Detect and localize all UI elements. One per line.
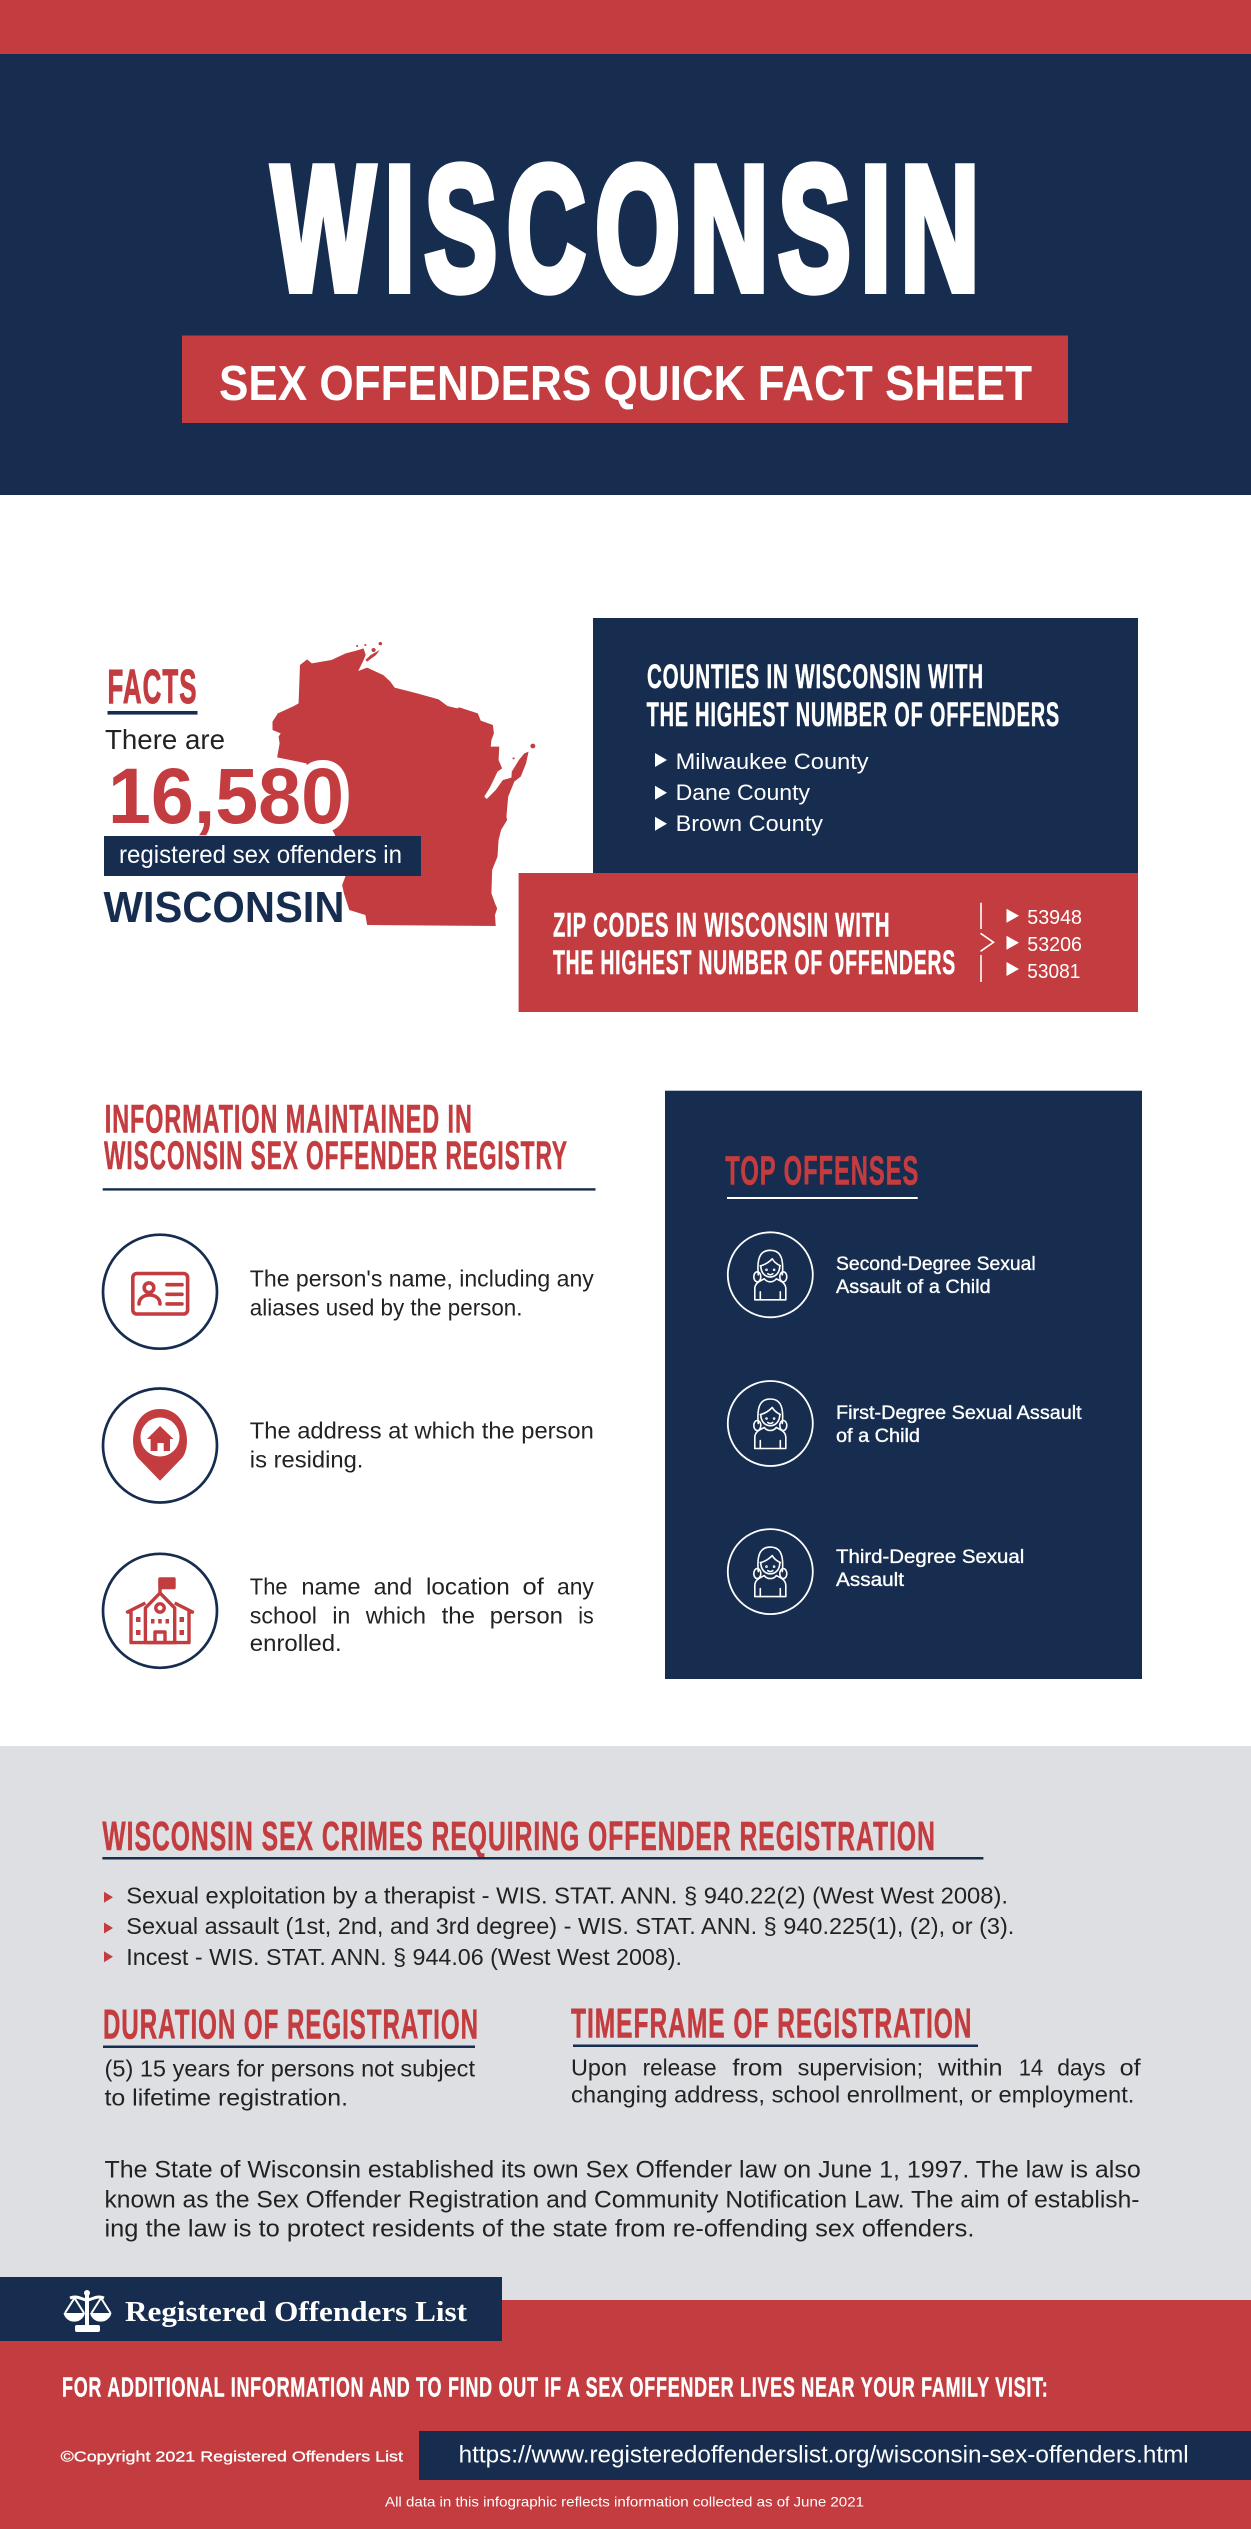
website link bar: [419, 2431, 1251, 2480]
text: school: location: [426, 1574, 510, 1600]
duration of registration: (5) 15 years for persons not subject: [104, 2056, 476, 2082]
law paragraph: ing the law is to protect residents of the state from re-offending sex offenders.: [104, 2216, 974, 2243]
text: third-degree: Third-Degree Sexual: [836, 1547, 1024, 1568]
text: school: the: [442, 1602, 475, 1628]
icon: id card: [103, 1235, 217, 1349]
text: second-degree: [836, 1254, 1036, 1298]
timeframe of registration: changing address, school enrollment, or employment.: [571, 2081, 1134, 2107]
text: school: in: [332, 1602, 350, 1628]
item: address: [103, 1388, 594, 1502]
facts heading: FACTS: [108, 661, 198, 714]
text: first-degree: of a Child: [836, 1426, 920, 1447]
sex crimes list: [104, 1882, 1014, 1970]
there are: There are: [105, 724, 225, 755]
facts heading: [108, 661, 198, 715]
timeframe of registration: supervision;: [798, 2055, 923, 2081]
duration of registration: DURATION OF REGISTRATION: [103, 2000, 479, 2047]
top offenses heading: TOP OFFENSES: [725, 1148, 919, 1194]
item: school: [103, 1554, 594, 1668]
counties list: Milwaukee County: [676, 749, 869, 774]
website link bar: https://www.registeredoffenderslist.org/wisconsin-sex-offenders.html: [459, 2441, 1189, 2468]
zip codes heading: ZIP CODES IN WISCONSIN WITH: [553, 907, 890, 945]
subtitle banner: [182, 336, 1068, 423]
panel: facts with Wisconsin map: [104, 642, 535, 932]
text: third-degree: [836, 1547, 1024, 1591]
registry heading: [103, 1097, 595, 1191]
text: name: aliases used by the person.: [250, 1294, 523, 1320]
logo: Registered Offenders List: Registered Offenders List: [125, 2296, 467, 2328]
text: second-degree: Assault of a Child: [836, 1277, 991, 1298]
state name: WISCONSIN: [104, 884, 344, 932]
icon: school building: [103, 1554, 217, 1668]
timeframe of registration: 14: [1019, 2055, 1043, 2081]
panel: sex crimes, duration and timeframe: [0, 1746, 1251, 2300]
text: school: which: [365, 1602, 426, 1628]
registry heading: WISCONSIN SEX OFFENDER REGISTRY: [104, 1134, 568, 1178]
icon: location pin with house: [103, 1388, 217, 1502]
chevron divider: [980, 903, 994, 982]
registered sex offenders label: registered sex offenders in: [119, 841, 402, 869]
panel: top offenses: [665, 1091, 1142, 1679]
panel: information maintained in registry: [103, 1097, 595, 1668]
text: school: [250, 1574, 594, 1656]
icon: child: [728, 1381, 813, 1466]
registered sex offenders label: [104, 836, 421, 876]
text: address: is residing.: [250, 1446, 363, 1472]
panel: zip codes with highest number of offenders: [519, 873, 1138, 1012]
counties heading: [647, 658, 1060, 734]
timeframe of registration: within: [937, 2055, 1002, 2081]
logo: Registered Offenders List: [0, 2277, 502, 2341]
text: school: and: [374, 1574, 412, 1600]
law paragraph: known as the Sex Offender Registration and Community Notification Law. The aim of establish-: [104, 2186, 1140, 2213]
timeframe of registration: [571, 1999, 1141, 2107]
timeframe of registration: days: [1057, 2055, 1106, 2081]
subtitle banner: SEX OFFENDERS QUICK FACT SHEET: [219, 357, 1032, 411]
icon: child: [728, 1232, 813, 1317]
zip codes list: 53948: [1027, 907, 1082, 929]
text: second-degree: Second-Degree Sexual: [836, 1254, 1036, 1275]
zip codes heading: [553, 907, 956, 982]
text: address: [250, 1418, 594, 1472]
timeframe of registration: from: [732, 2055, 783, 2081]
duration of registration: [103, 2000, 479, 2111]
text: school: school: [250, 1602, 317, 1628]
copyright: ©Copyright 2021 Registered Offenders List: [61, 2449, 404, 2466]
registry heading: INFORMATION MAINTAINED IN: [105, 1097, 473, 1141]
sex crimes list: Sexual assault (1st, 2nd, and 3rd degree) - WIS. STAT. ANN. § 940.225(1), (2), or (3).: [126, 1913, 1014, 1939]
text: school: enrolled.: [250, 1630, 342, 1656]
text: school: person: [490, 1602, 563, 1628]
timeframe of registration: of: [1120, 2055, 1141, 2081]
header banner: [0, 0, 1251, 495]
text: school: The: [250, 1574, 288, 1600]
duration of registration: to lifetime registration.: [104, 2085, 348, 2111]
text: first-degree: [836, 1403, 1082, 1447]
text: school: name: [301, 1574, 361, 1600]
counties heading: COUNTIES IN WISCONSIN WITH: [647, 658, 984, 696]
law paragraph: The State of Wisconsin established its own Sex Offender law on June 1, 1997. The law is also: [104, 2156, 1141, 2183]
text: school: any: [557, 1574, 594, 1600]
law paragraph: [104, 2156, 1141, 2243]
zip codes list: [1006, 907, 1082, 983]
text: name: [250, 1266, 594, 1320]
footer: [0, 2277, 1251, 2529]
panel: counties with highest number of offenders: [593, 618, 1138, 873]
timeframe of registration: TIMEFRAME OF REGISTRATION: [571, 1999, 972, 2046]
icon: scales of justice: [64, 2290, 112, 2332]
text: first-degree: First-Degree Sexual Assault: [836, 1403, 1082, 1424]
counties list: Brown County: [676, 811, 823, 836]
sex crimes list: Incest - WIS. STAT. ANN. § 944.06 (West West 2008).: [126, 1944, 682, 1970]
text: school: is: [578, 1602, 594, 1628]
text: name: The person's name, including any: [250, 1266, 594, 1292]
offense 1: [728, 1232, 1036, 1317]
counties list: Dane County: [676, 780, 810, 805]
icon: child: [728, 1529, 813, 1614]
text: school: of: [522, 1574, 544, 1600]
counties list: [655, 749, 869, 836]
zip codes list: 53206: [1027, 934, 1082, 956]
map of Wisconsin: [272, 642, 535, 926]
sex crimes list: Sexual exploitation by a therapist - WIS. STAT. ANN. § 940.22(2) (West West 2008).: [126, 1882, 1008, 1908]
zip codes heading: THE HIGHEST NUMBER OF OFFENDERS: [553, 944, 956, 982]
offense 2: [728, 1381, 1082, 1466]
timeframe of registration: Upon: [571, 2055, 627, 2081]
zip codes list: 53081: [1027, 961, 1080, 983]
text: third-degree: Assault: [836, 1570, 905, 1591]
offense 3: [728, 1529, 1024, 1614]
number: 16,580: 16,580: [108, 751, 344, 840]
item: name: [103, 1235, 594, 1349]
text: address: The address at which the person: [250, 1418, 594, 1444]
data note: All data in this infographic reflects information collected as of June 2021: [385, 2494, 864, 2510]
timeframe of registration: release: [643, 2055, 717, 2081]
